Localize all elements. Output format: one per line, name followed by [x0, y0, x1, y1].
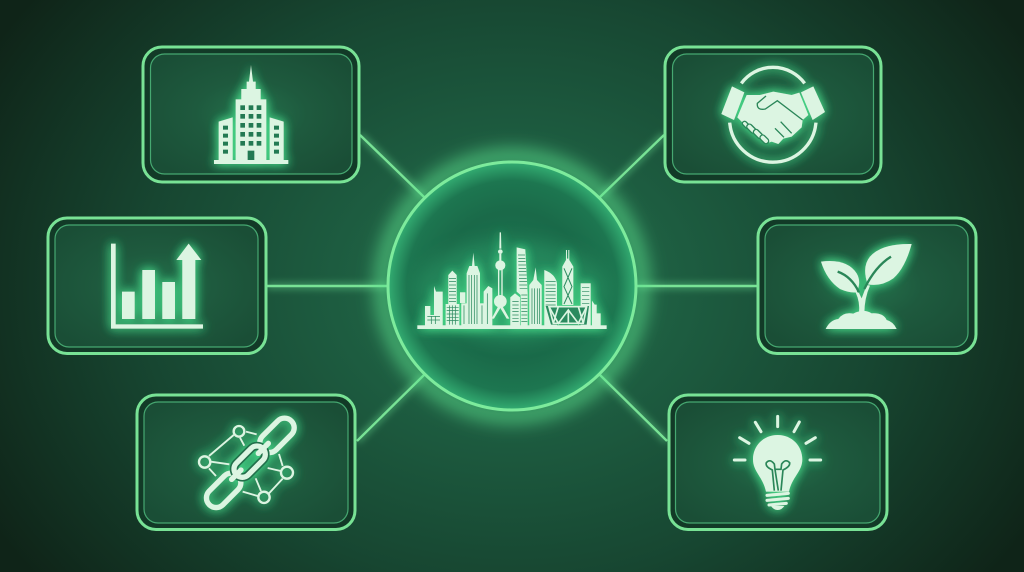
panel: light bulb	[669, 395, 887, 530]
panel: handshake	[665, 47, 881, 182]
icon: handshake	[721, 67, 825, 162]
icon: sprout	[821, 244, 912, 329]
panel: office building	[143, 47, 359, 182]
connector lines	[267, 135, 757, 441]
icon: office building	[214, 65, 288, 164]
window and truss details	[427, 255, 589, 325]
icon: city skyline	[417, 232, 607, 329]
icon: chain with network nodes	[199, 414, 298, 512]
panel: sprout	[758, 218, 976, 354]
central hub circle	[383, 157, 641, 415]
icon: light bulb	[734, 416, 821, 510]
panel: chain network	[137, 395, 355, 530]
panel: growth bar chart	[48, 218, 266, 354]
icon: bar chart with arrow	[111, 244, 203, 329]
